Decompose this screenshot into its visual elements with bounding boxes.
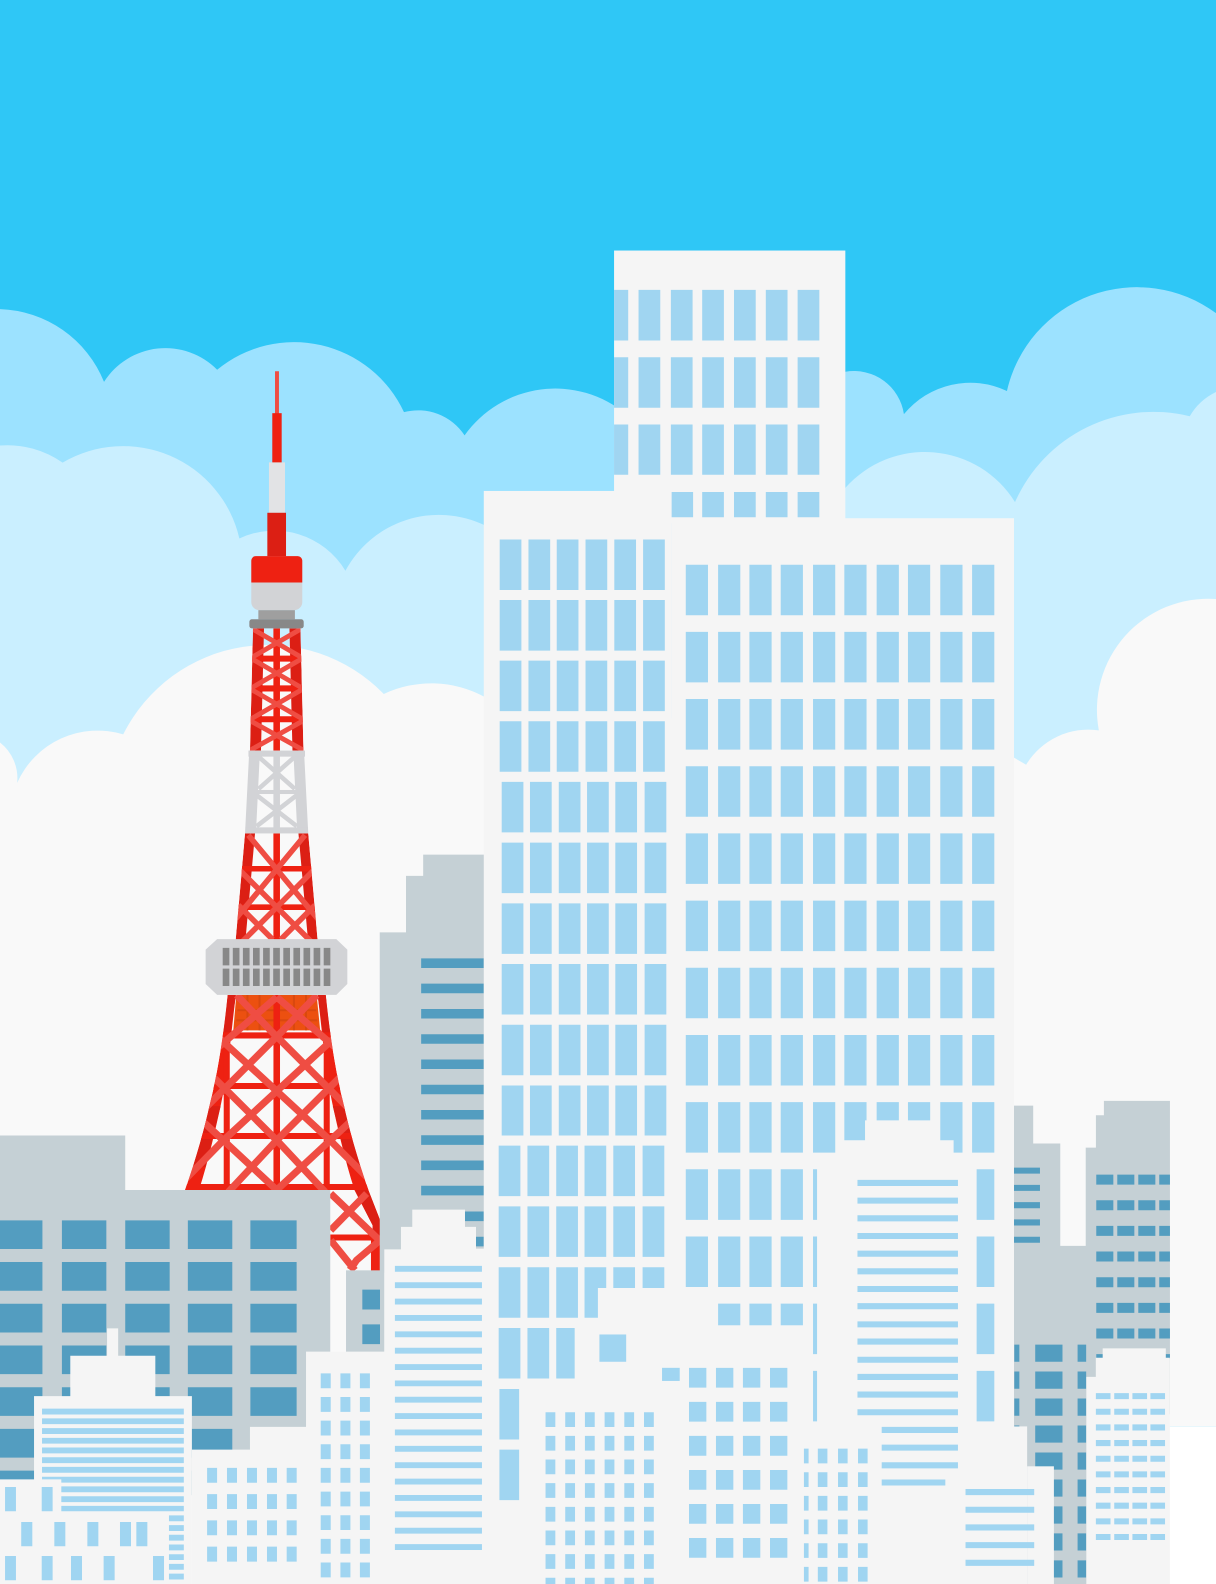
building: lined block centre left (384, 1210, 485, 1584)
tower: antenna (267, 371, 286, 556)
building: small grey annex (346, 1270, 384, 1353)
cloud layer: back (0, 287, 1216, 909)
building: small tower with antenna, bottom left (34, 1328, 192, 1584)
windows: lined bands on foreground block (857, 1183, 958, 1482)
tower: orange machine floor (233, 995, 320, 1030)
tower: observation deck (206, 939, 347, 995)
building: lower centre block (519, 1288, 1054, 1584)
tower: red and white lattice tower (177, 371, 380, 1271)
building: grey block right (1014, 1101, 1170, 1584)
cloud layer: front (0, 599, 1216, 1426)
building: grey block left (0, 1135, 330, 1495)
cloud layer: middle (0, 392, 1216, 1010)
tower: middle lattice (236, 834, 318, 940)
building: grey block behind tall tower (380, 855, 486, 1273)
building: tall main left wing (484, 491, 672, 1584)
tower: white section (245, 751, 308, 833)
building: tall main right wing (672, 518, 1014, 1428)
tower: lower lattice (177, 995, 380, 1271)
building: left block with dotted windows (192, 1352, 390, 1584)
building: right front block (1086, 1348, 1170, 1584)
page background below clouds (0, 1426, 1216, 1584)
building: foreground block (817, 1120, 977, 1584)
tower: upper lattice (248, 628, 305, 751)
building: bottom left low block (0, 1479, 192, 1584)
tower: top cabin (249, 556, 304, 628)
building: tall rear tower top (614, 251, 845, 523)
